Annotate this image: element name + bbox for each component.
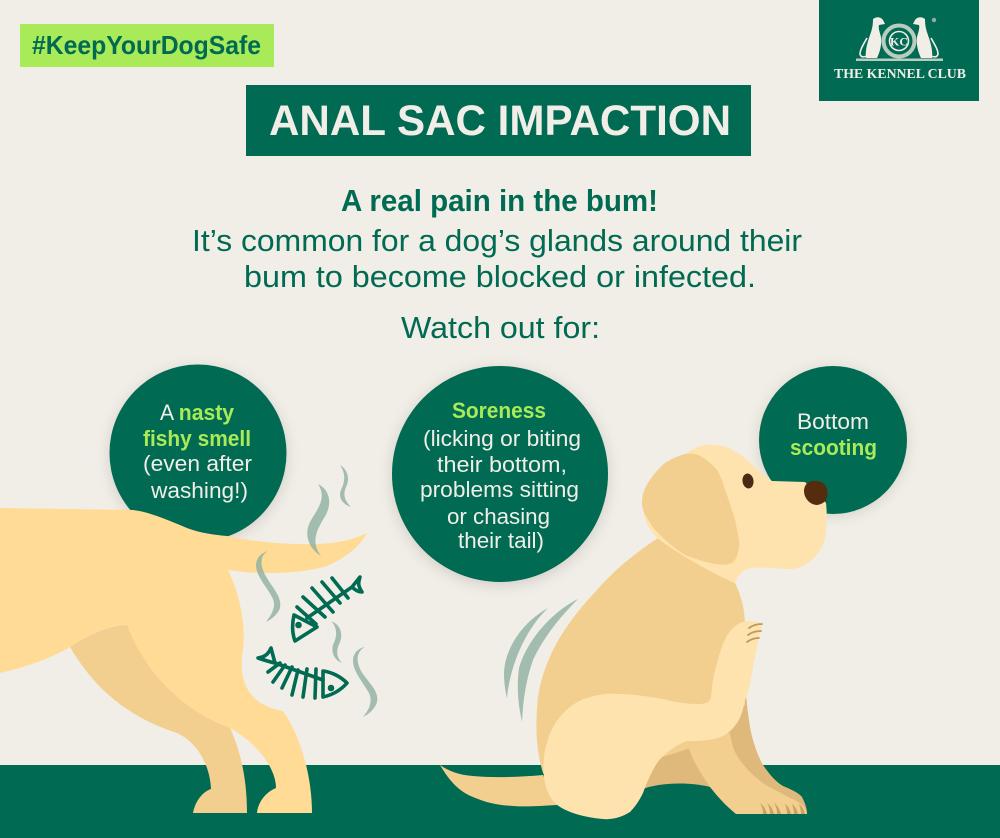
callout: bottom scooting: Bottom	[797, 409, 869, 434]
logo: The Kennel Club	[819, 0, 979, 101]
far hind leg	[70, 625, 247, 813]
torso	[536, 538, 745, 790]
callout: soreness: (licking or biting	[423, 426, 581, 451]
callout: soreness: or chasing	[447, 504, 550, 529]
intro text: It’s common for a dog’s glands around their	[192, 223, 802, 258]
icon: crest: KC	[890, 34, 908, 48]
tail	[440, 765, 557, 806]
icon: crest	[884, 26, 914, 56]
hashtag badge	[20, 24, 274, 67]
callout: soreness	[391, 366, 609, 586]
haunch and raised paw	[543, 621, 762, 819]
far hind leg shadow	[640, 735, 745, 800]
logo wordmark: THE KENNEL CLUB	[834, 66, 966, 81]
illustration: sitting dog	[440, 445, 828, 819]
callout: fishy smell: washing!)	[150, 478, 248, 503]
icon: fish skeleton lower	[258, 648, 347, 698]
callout: fishy smell	[109, 364, 287, 545]
title: ANAL SAC IMPACTION	[269, 97, 731, 145]
green floor band	[0, 765, 1000, 838]
body and near hind leg	[0, 508, 367, 813]
paw claws	[747, 624, 762, 642]
callout: soreness: Soreness	[452, 398, 546, 423]
ear	[642, 454, 739, 565]
icon: fish skeleton upper	[293, 577, 362, 641]
callout: soreness: their tail)	[458, 528, 544, 553]
intro text: A real pain in the bum!	[341, 183, 658, 218]
callout: fishy smell: (even after	[143, 451, 252, 476]
hashtag badge: #KeepYourDogSafe	[32, 30, 261, 60]
smell wisps	[256, 465, 377, 717]
toes	[760, 803, 805, 814]
callout: bottom scooting	[759, 366, 907, 516]
illustration: standing dog rear	[0, 508, 367, 813]
callout: fishy smell: fishy smell	[143, 426, 251, 451]
intro text: Watch out for:	[401, 310, 600, 345]
callout: soreness: their bottom,	[437, 452, 567, 477]
eye	[742, 473, 754, 489]
icon: left dog	[860, 17, 885, 58]
title	[246, 85, 751, 156]
nose	[804, 481, 828, 505]
callout: fishy smell: A nasty	[160, 400, 235, 425]
icon: right dog	[913, 17, 938, 58]
intro text	[192, 183, 802, 345]
callout: soreness: problems sitting	[420, 477, 579, 502]
intro text: bum to become blocked or infected.	[244, 259, 756, 294]
hind lower leg	[687, 733, 807, 814]
callout: bottom scooting: scooting	[790, 435, 877, 460]
head	[643, 445, 827, 583]
plinth	[856, 58, 943, 61]
registered mark	[932, 18, 936, 22]
motion lines	[504, 599, 578, 722]
